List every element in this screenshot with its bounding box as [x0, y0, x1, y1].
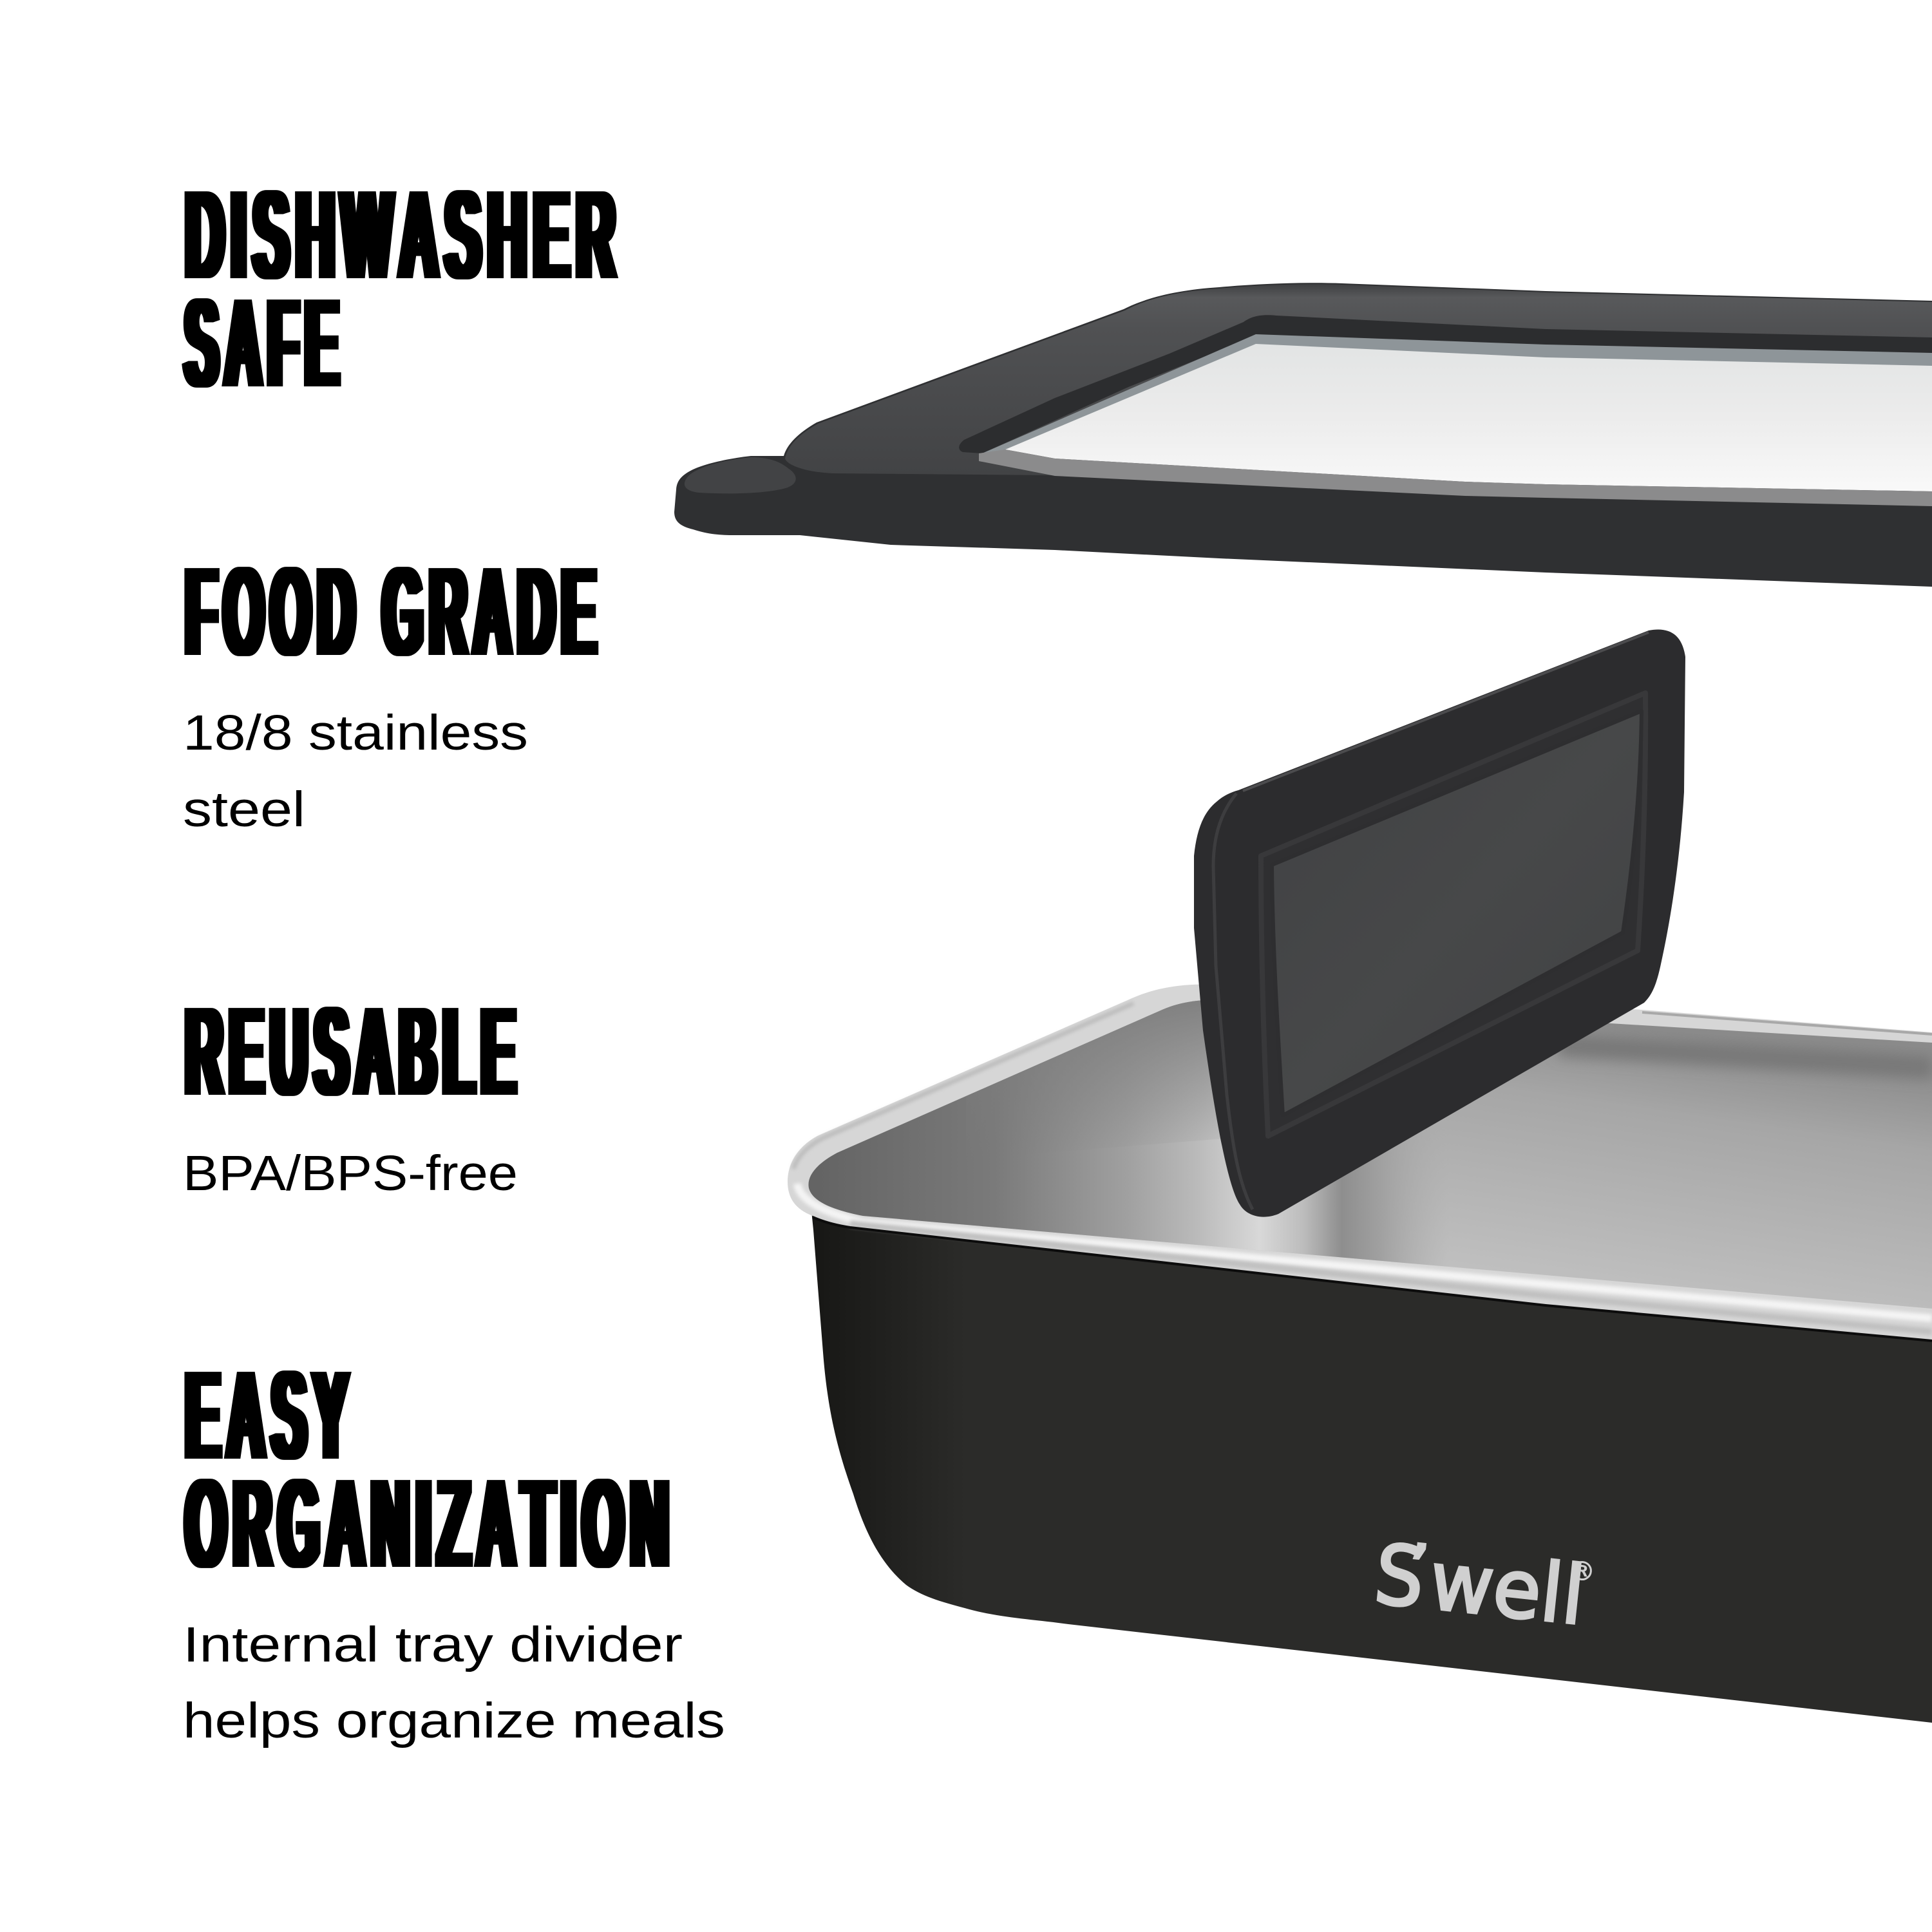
lid blue-grey inner band	[982, 334, 1932, 453]
feature: dishwasher safe heading: SAFE	[185, 272, 345, 413]
illustration: tray base	[773, 966, 1932, 1723]
rim left shade	[793, 1003, 1133, 1169]
logo: S'well	[1370, 1526, 1597, 1645]
description: Internal tray divider	[183, 1617, 683, 1672]
description: BPA/BPS-free	[183, 1146, 518, 1201]
feature: dishwasher safe heading	[185, 164, 622, 413]
description: steel	[183, 782, 305, 837]
logo drop apostrophe: ’	[1404, 1530, 1432, 1607]
lid inner groove	[959, 315, 1932, 453]
divider top edge highlight	[1243, 632, 1649, 791]
rim back shade	[1642, 1012, 1932, 1034]
feature: reusable	[183, 981, 522, 1201]
illustration: lid	[674, 283, 1932, 587]
interior back-left shade	[1007, 1001, 1220, 1139]
rim front shine	[797, 1184, 1932, 1318]
interior left wall and reflections	[808, 1021, 1425, 1265]
heading	[185, 1345, 676, 1594]
feature: food grade	[183, 541, 603, 837]
text: REUSABLE	[185, 981, 522, 1122]
divider left edge strip	[1213, 793, 1253, 1209]
text: ORGANIZATION	[185, 1453, 676, 1594]
tray rim	[788, 985, 1932, 1340]
divider step ring	[1261, 693, 1645, 1136]
description: 18/8 stainless	[183, 705, 528, 761]
text: FOOD GRADE	[185, 541, 603, 682]
text: DISHWASHER	[185, 164, 622, 305]
lid tab top	[685, 457, 796, 493]
divider inner panel	[1272, 711, 1642, 1115]
logo letters well: well	[1425, 1534, 1589, 1643]
description	[183, 1617, 725, 1748]
heading: EASY	[185, 1345, 355, 1486]
tray black body	[811, 1211, 1932, 1723]
logo letter S: S	[1370, 1526, 1429, 1627]
lid glass panel	[1005, 344, 1932, 491]
lid silhouette	[674, 283, 1932, 587]
interior floor	[935, 1001, 1932, 1309]
interior back wall shadow	[1558, 1034, 1932, 1079]
divider silhouette	[1194, 630, 1685, 1217]
rim under-edge line	[813, 1217, 1932, 1341]
description	[183, 705, 528, 837]
logo registered mark: ®	[1567, 1556, 1596, 1588]
tray stainless interior	[808, 1001, 1932, 1309]
rim front shade	[850, 1224, 1932, 1332]
lid lower grey band	[979, 450, 1932, 506]
illustration: divider	[1194, 630, 1685, 1217]
lid top surface	[785, 284, 1932, 506]
description: helps organize meals	[183, 1693, 725, 1748]
feature: easy organization	[183, 1345, 725, 1748]
